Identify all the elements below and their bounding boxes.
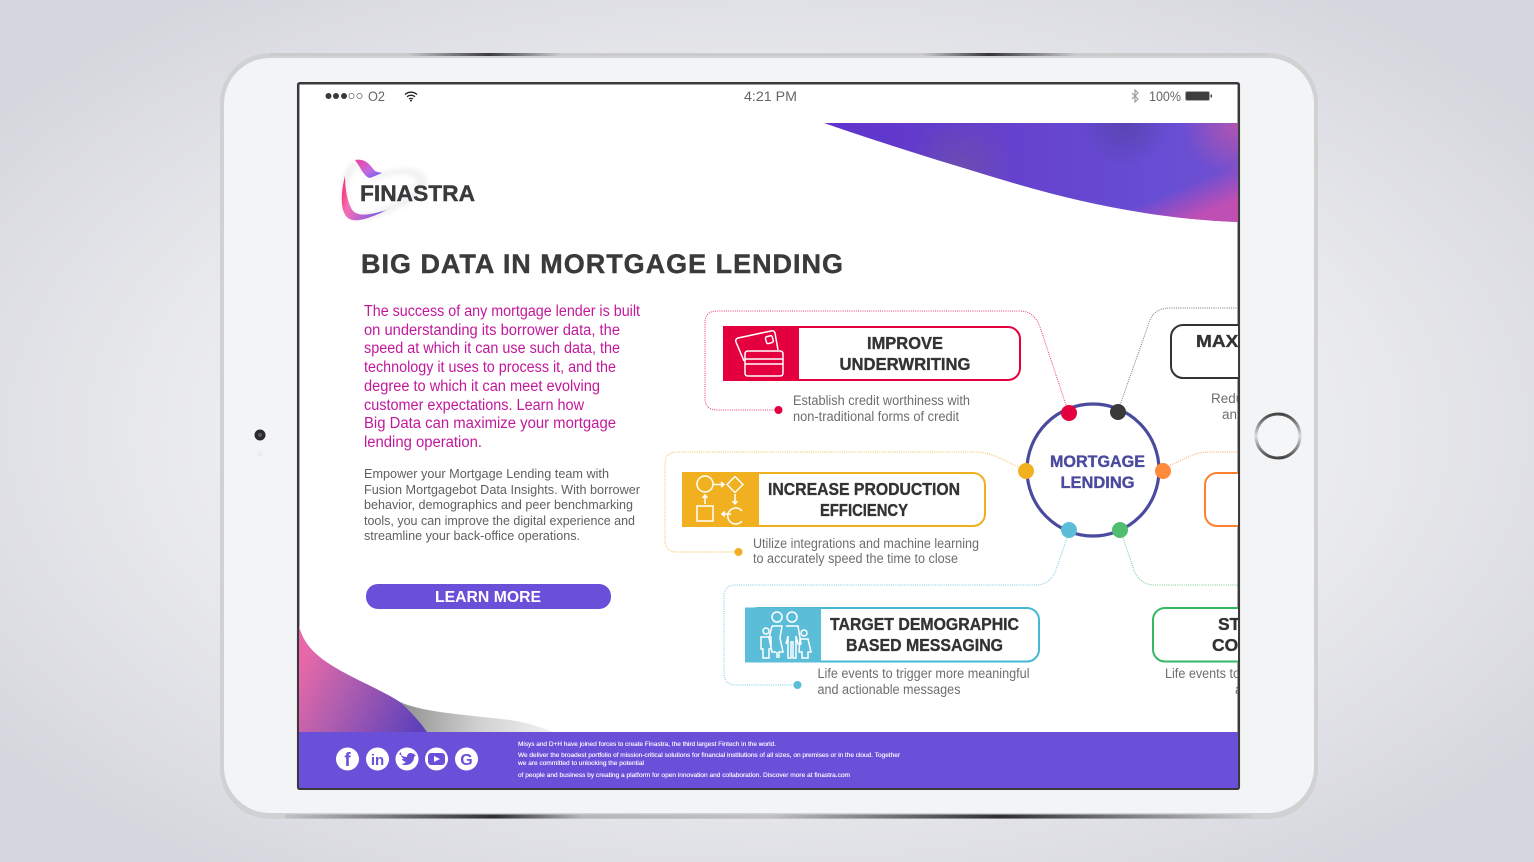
card: target demographic based messaging: TARGET DEMOGRAPHIC	[830, 614, 1019, 634]
top gradient wave	[824, 123, 1238, 222]
description: demographic: and actionable messages	[818, 682, 961, 697]
card: green (cropped)	[1152, 607, 1238, 662]
connector: underwriting	[705, 311, 1066, 410]
footer text	[517, 742, 900, 779]
intro text: on understanding its borrower data, the	[364, 322, 620, 339]
description: demographic	[818, 666, 1030, 697]
icon: google: G	[460, 752, 473, 769]
description: maximize (cropped)	[1212, 393, 1238, 419]
card: green (cropped): COMPLIANCE	[1212, 635, 1330, 655]
connector: green	[1123, 538, 1238, 585]
icon: twitter	[396, 748, 418, 770]
home button	[1256, 414, 1300, 458]
card: increase production efficiency: INCREASE PRODUCTION	[768, 479, 960, 499]
hub label: LENDING	[1060, 474, 1134, 492]
logo ribbon left	[342, 176, 387, 220]
title: BIG DATA IN MORTGAGE LENDING	[361, 249, 843, 279]
screen content	[299, 88, 1332, 788]
hub label	[1050, 455, 1145, 488]
icon: google	[455, 748, 478, 770]
description: underwriting	[794, 395, 970, 421]
icon: youtube	[425, 748, 448, 770]
body text: behavior, demographics and peer benchmarking	[364, 497, 633, 512]
footer text: we are committed to unlocking the potential	[517, 761, 644, 767]
connector: maximize	[1120, 308, 1238, 405]
tablet body	[220, 53, 1318, 819]
card: maximize (cropped): MAXIMIZE	[1196, 331, 1289, 351]
connector: orange	[1170, 452, 1238, 465]
description: underwriting: Establish credit worthiness with	[793, 393, 970, 408]
description: green (cropped): and	[1235, 682, 1258, 697]
intro text: The success of any mortgage lender is built	[364, 303, 641, 320]
body text: streamline your back-office operations.	[364, 528, 580, 543]
card: target demographic based messaging: BASED MESSAGING	[846, 635, 1003, 655]
learn more button: LEARN MORE	[435, 589, 541, 606]
description: maximize (cropped): and	[1222, 407, 1245, 422]
status bar: 100%	[1149, 88, 1181, 104]
status bar: O2	[368, 88, 385, 104]
description: production	[753, 536, 979, 566]
card: improve underwriting	[723, 326, 1020, 381]
icon: credit cards	[723, 326, 799, 381]
marker: demographic	[794, 681, 802, 689]
card: maximize (cropped)	[1170, 324, 1238, 379]
description: underwriting: non-traditional forms of credit	[793, 409, 959, 424]
logo wordmark: FINASTRA	[360, 181, 475, 206]
body text: Empower your Mortgage Lending team with	[364, 466, 609, 481]
hub nodes	[1018, 404, 1171, 538]
card: target demographic based messaging	[745, 608, 1039, 662]
intro text: lending operation.	[364, 434, 482, 451]
icon: linkedin: in	[371, 752, 384, 769]
logo white ribbon shadow	[341, 162, 427, 220]
marker: production	[734, 548, 742, 556]
marker: underwriting	[774, 406, 782, 414]
footer text: We deliver the broadest portfolio of mission-critical solutions for financial institutions of all sizes, on premises or in the cloud. Together	[518, 753, 900, 759]
intro text	[364, 303, 641, 451]
logo inner white	[348, 168, 417, 213]
card: green (cropped): STREAMLINE	[1218, 614, 1332, 634]
intro text: technology it uses to process it, and the	[364, 359, 616, 376]
card: improve underwriting: UNDERWRITING	[840, 354, 970, 374]
card: improve underwriting: IMPROVE	[867, 333, 943, 353]
screen	[298, 83, 1239, 789]
connector: demographic	[724, 538, 1067, 685]
front camera	[254, 430, 266, 457]
hub label: MORTGAGE	[1050, 453, 1145, 471]
social icons	[336, 748, 478, 771]
body text: Fusion Mortgagebot Data Insights. With borrower	[364, 482, 641, 497]
footer text: of people and business by creating a platform for open innovation and collaboration. Discover more at finastra.com	[518, 773, 850, 779]
description: maximize (cropped): Reduce	[1211, 391, 1258, 406]
card: increase production efficiency	[682, 472, 985, 527]
intro text: speed at which it can use such data, the	[364, 340, 620, 357]
intro text: customer expectations. Learn how	[364, 397, 585, 414]
footer band	[299, 732, 1238, 788]
logo ribbon top	[355, 160, 382, 178]
intro text: Big Data can maximize your mortgage	[364, 415, 616, 432]
icon: facebook	[336, 748, 359, 771]
learn more button	[366, 584, 611, 609]
description: production: Utilize integrations and machine learning	[753, 536, 979, 551]
description: demographic: Life events to trigger more meaningful	[818, 666, 1030, 681]
hub: mortgage lending	[1018, 404, 1171, 538]
body text	[364, 466, 641, 543]
description: green (cropped)	[1166, 668, 1238, 694]
body text: tools, you can improve the digital experience and	[364, 513, 635, 528]
status bar: 4:21 PM	[744, 88, 797, 104]
icon: process flow	[682, 472, 759, 527]
description: production: to accurately speed the time to close	[753, 551, 958, 566]
description: green (cropped): Life events to	[1165, 666, 1240, 681]
logo	[341, 160, 475, 220]
icon: family	[745, 608, 821, 662]
card: orange (cropped)	[1204, 472, 1238, 527]
bottom left page curl	[299, 626, 553, 732]
footer text: Misys and D+H have joined forces to create Finastra, the third largest Fintech in the world.	[518, 742, 776, 748]
icon: facebook: f	[344, 750, 351, 771]
intro text: degree to which it can meet evolving	[364, 378, 600, 395]
icon: linkedin	[366, 748, 389, 770]
card: increase production efficiency: EFFICIENCY	[820, 500, 908, 520]
connector: production	[665, 452, 1020, 552]
status bar	[326, 88, 1212, 104]
